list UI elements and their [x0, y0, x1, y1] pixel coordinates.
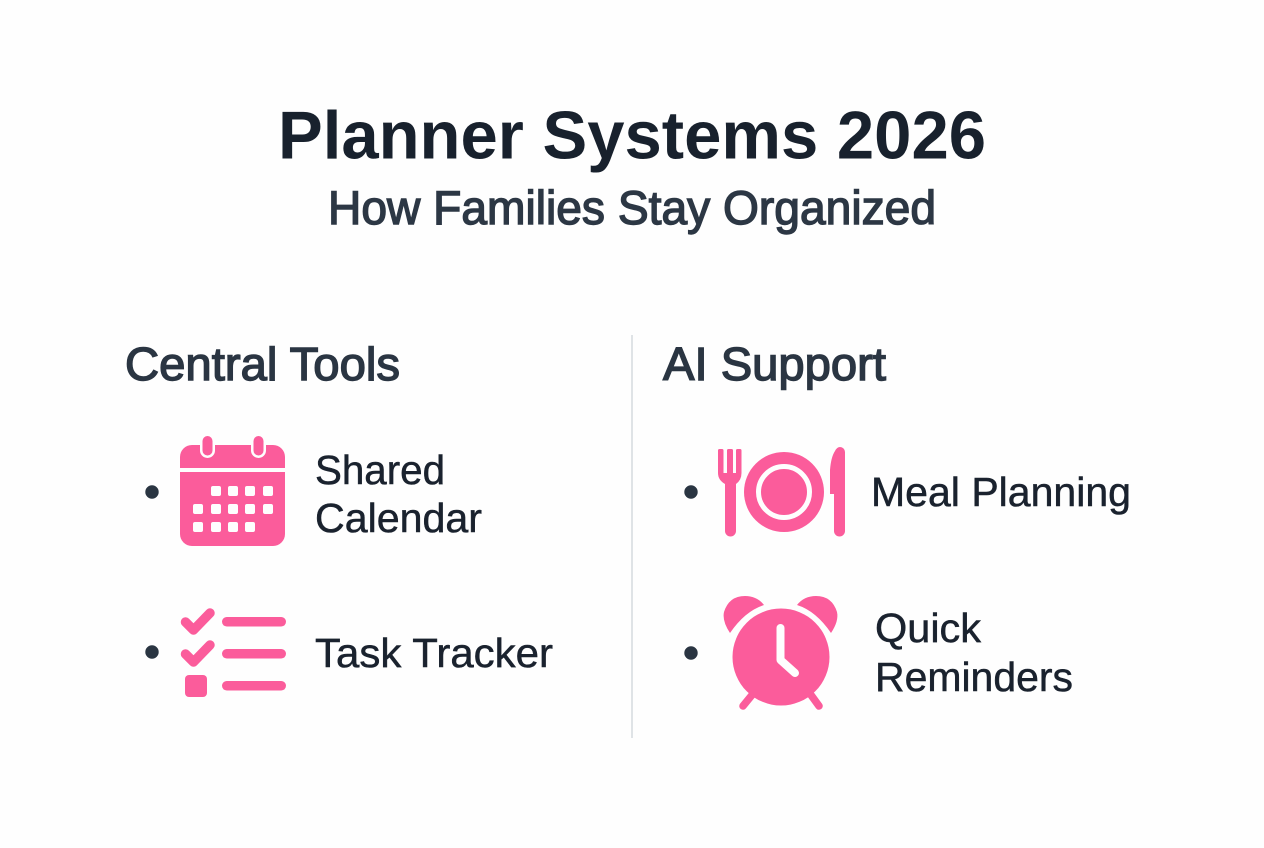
icon: alarm clock [724, 596, 837, 706]
subtitle: How Families Stay Organized [328, 181, 936, 234]
label: task tracker: Task Tracker [315, 630, 553, 676]
bullet: shared calendar [145, 485, 159, 499]
bullet: meal planning [684, 485, 698, 499]
icon: checklist [185, 613, 286, 697]
heading: ai support: AI Support [663, 338, 886, 390]
label: quick reminders: Reminders [875, 654, 1073, 700]
bullet: task tracker [145, 645, 159, 659]
title: Planner Systems 2026 [278, 98, 986, 174]
label: quick reminders: Quick [875, 605, 981, 651]
icon: calendar [180, 433, 285, 546]
panel: ai support [663, 338, 1131, 706]
panel: central tools [125, 338, 553, 697]
label: shared calendar: Shared [315, 447, 445, 493]
label: meal planning: Meal Planning [871, 469, 1131, 515]
label: quick reminders [875, 605, 1073, 700]
icon: plate and cutlery [718, 447, 845, 536]
label: shared calendar: Calendar [315, 495, 482, 541]
bullet: quick reminders [684, 646, 698, 660]
heading: central tools: Central Tools [125, 338, 400, 390]
label: shared calendar [315, 447, 482, 541]
